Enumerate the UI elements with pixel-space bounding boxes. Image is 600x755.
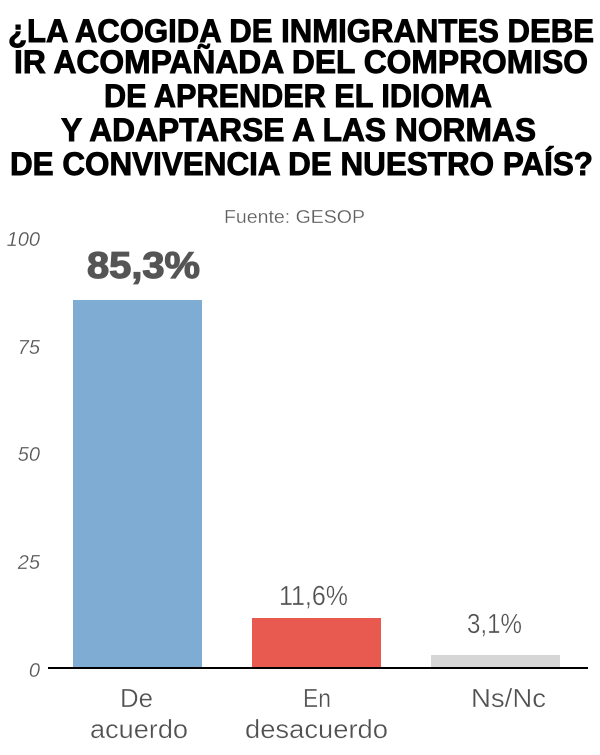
- y axis labels: 75: [18, 337, 41, 359]
- baseline axis: [48, 667, 588, 669]
- title: DE CONVIVENCIA DE NUESTRO PAÍS?: [10, 146, 593, 182]
- y axis labels: 0: [29, 660, 40, 682]
- y axis labels: 100: [7, 229, 40, 251]
- title: IR ACOMPAÑADA DEL COMPROMISO: [14, 44, 588, 80]
- bar: En desacuerdo: [252, 618, 381, 668]
- title: Y ADAPTARSE A LAS NORMAS: [61, 112, 536, 148]
- category label: En desacuerdo: desacuerdo: [245, 714, 388, 744]
- title: ¿LA ACOGIDA DE INMIGRANTES DEBE: [8, 13, 594, 49]
- y axis labels: 50: [18, 444, 40, 466]
- source note: Fuente: GESOP: [224, 206, 365, 227]
- category label: En desacuerdo: En: [303, 683, 331, 713]
- category label: Ns/Nc: Ns/Nc: [471, 683, 546, 713]
- category label: De acuerdo: acuerdo: [90, 714, 188, 744]
- title: DE APRENDER EL IDIOMA: [104, 78, 492, 114]
- category label: De acuerdo: [90, 683, 188, 744]
- y axis labels: [7, 229, 41, 682]
- category label: En desacuerdo: [245, 683, 388, 744]
- category label: De acuerdo: De: [120, 683, 153, 713]
- title: [8, 13, 594, 182]
- value: 85,3%: 85,3%: [87, 245, 200, 286]
- value: 3,1%: 3,1%: [467, 608, 522, 639]
- bar: De acuerdo: [73, 300, 202, 668]
- bar: Ns/Nc: [431, 655, 560, 668]
- value: 11,6%: 11,6%: [279, 580, 348, 611]
- y axis labels: 25: [17, 552, 41, 574]
